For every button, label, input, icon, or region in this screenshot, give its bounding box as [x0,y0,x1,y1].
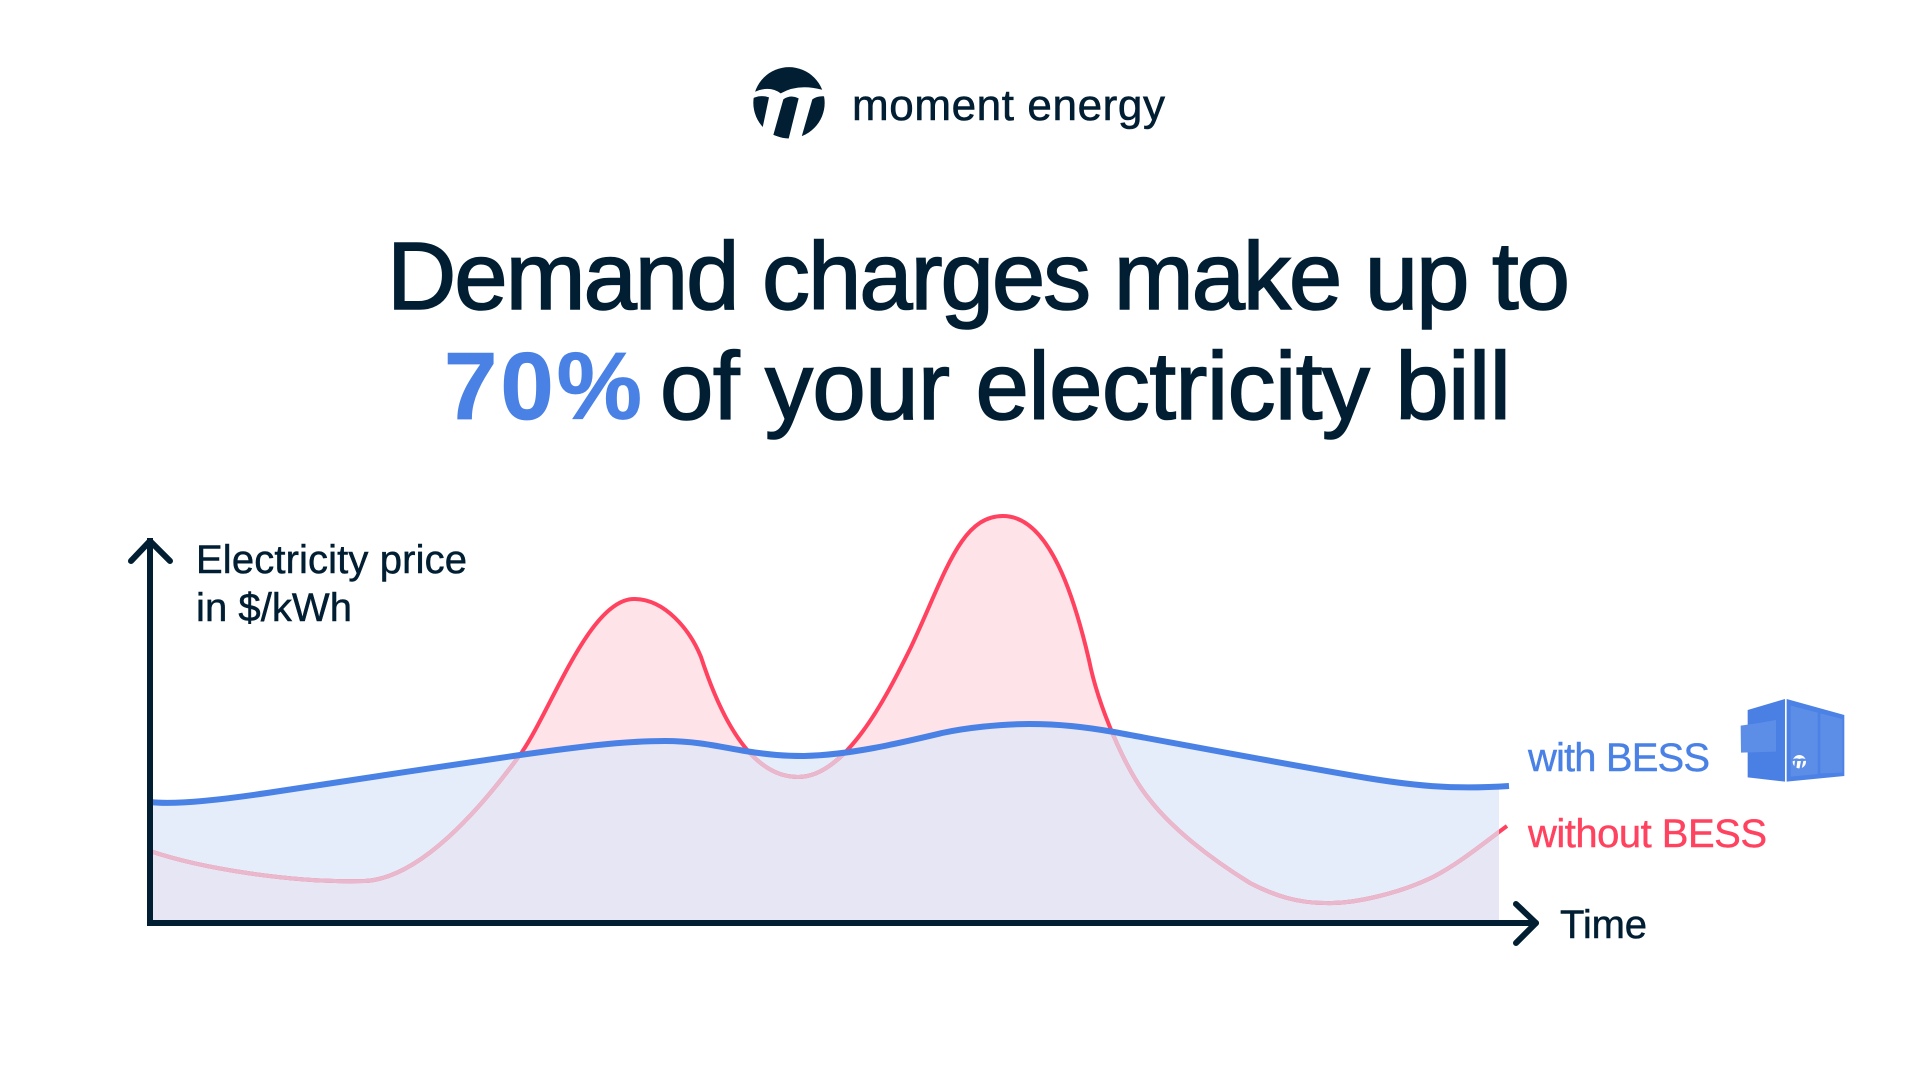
area: without BESS peaks [525,518,1108,752]
area: overlap of both curves [147,516,1507,930]
wordmark: moment energy [852,81,1165,130]
x axis label: Time [1560,903,1647,947]
icon: battery container [1741,699,1844,782]
area: with BESS [153,736,1499,901]
title line 2: of your electricity bill [660,333,1511,440]
y axis label: Electricity price [196,538,467,582]
legend: without BESS: without BESS [1527,812,1767,856]
line: without BESS, faded under the BESS area [153,734,1499,905]
chart: electricity price over time [131,516,1767,947]
legend: with BESS: with BESS [1527,736,1710,780]
arrow: y axis [131,541,170,923]
y axis label: in $/kWh [196,586,352,630]
title line 1: Demand charges make up to [387,223,1570,330]
title highlight: 70%: 70% [444,333,642,440]
icon: moment energy mark [753,67,825,138]
title [387,223,1570,440]
line: without BESS [150,516,1507,903]
logo: moment energy [750,63,1165,140]
y axis label [196,538,467,630]
arrow: x axis [150,904,1536,943]
line: with BESS [150,724,1509,803]
